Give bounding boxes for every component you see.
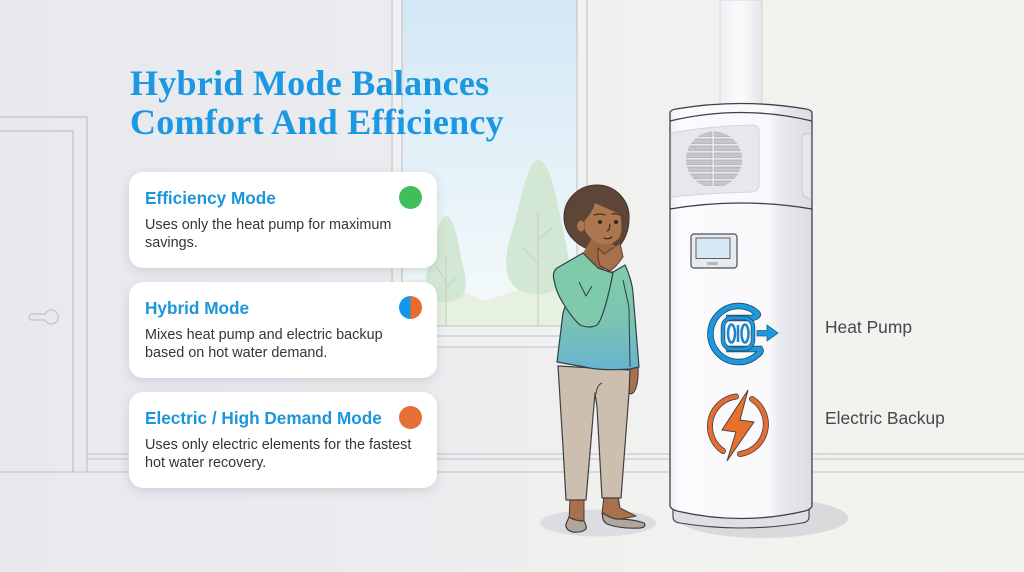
card: electric high demand mode xyxy=(129,392,437,488)
title xyxy=(130,63,504,142)
vent pipe xyxy=(720,0,762,104)
sweater torso xyxy=(557,253,639,370)
top band lines xyxy=(670,112,812,209)
ear xyxy=(577,220,585,232)
card: efficiency mode xyxy=(129,172,437,268)
side panel recess xyxy=(802,134,811,199)
tank floor shadow xyxy=(678,498,848,538)
water heater tank xyxy=(670,104,848,538)
person floor shadow xyxy=(540,510,656,536)
ankles xyxy=(569,496,636,522)
neck xyxy=(583,238,616,272)
icon: electric bolt xyxy=(710,390,766,461)
card description xyxy=(145,326,383,360)
tank body xyxy=(670,104,812,518)
card description: Mixes heat pump and electric backup xyxy=(145,326,383,342)
raised arm xyxy=(553,253,613,327)
far hand xyxy=(629,366,638,394)
door xyxy=(0,117,87,472)
arrow xyxy=(757,325,778,341)
shoes xyxy=(566,513,645,532)
card description xyxy=(145,436,412,470)
fan grille xyxy=(684,132,744,186)
card heading: Hybrid Mode xyxy=(145,298,249,318)
sweater fold xyxy=(579,282,592,296)
tank base xyxy=(673,509,809,528)
near arm line xyxy=(623,280,630,367)
hair xyxy=(564,185,629,250)
status dot: half blue half orange xyxy=(399,296,422,319)
icon: heat pump xyxy=(710,306,778,362)
card heading: Efficiency Mode xyxy=(145,188,276,208)
baseboard and floor lines xyxy=(0,454,1024,472)
status dot: orange xyxy=(399,406,422,429)
face xyxy=(584,203,622,244)
card description: based on hot water demand. xyxy=(145,344,327,360)
display button xyxy=(707,262,718,265)
person thinking xyxy=(540,185,656,536)
card heading: Electric / High Demand Mode xyxy=(145,408,382,428)
upper panel recess xyxy=(671,125,759,197)
title: Comfort And Efficiency xyxy=(130,102,504,142)
trouser crease xyxy=(596,383,602,394)
control display xyxy=(691,234,737,268)
door handle xyxy=(29,310,58,324)
window frame xyxy=(392,0,587,347)
card description: savings. xyxy=(145,234,198,250)
label: electric backup: Electric Backup xyxy=(825,408,945,428)
card description xyxy=(145,216,391,250)
label: heat pump: Heat Pump xyxy=(825,317,912,337)
title: Hybrid Mode Balances xyxy=(130,63,489,103)
sky xyxy=(402,0,577,326)
card description: hot water recovery. xyxy=(145,454,266,470)
trousers xyxy=(558,366,630,500)
hand at chin xyxy=(598,243,623,271)
trees and hills xyxy=(402,160,577,326)
status dot: green xyxy=(399,186,422,209)
facial features xyxy=(594,214,620,239)
card description: Uses only the heat pump for maximum xyxy=(145,216,391,232)
card description: Uses only electric elements for the fastest xyxy=(145,436,411,452)
window xyxy=(392,0,587,347)
screen xyxy=(696,238,730,258)
card: hybrid mode xyxy=(129,282,437,378)
